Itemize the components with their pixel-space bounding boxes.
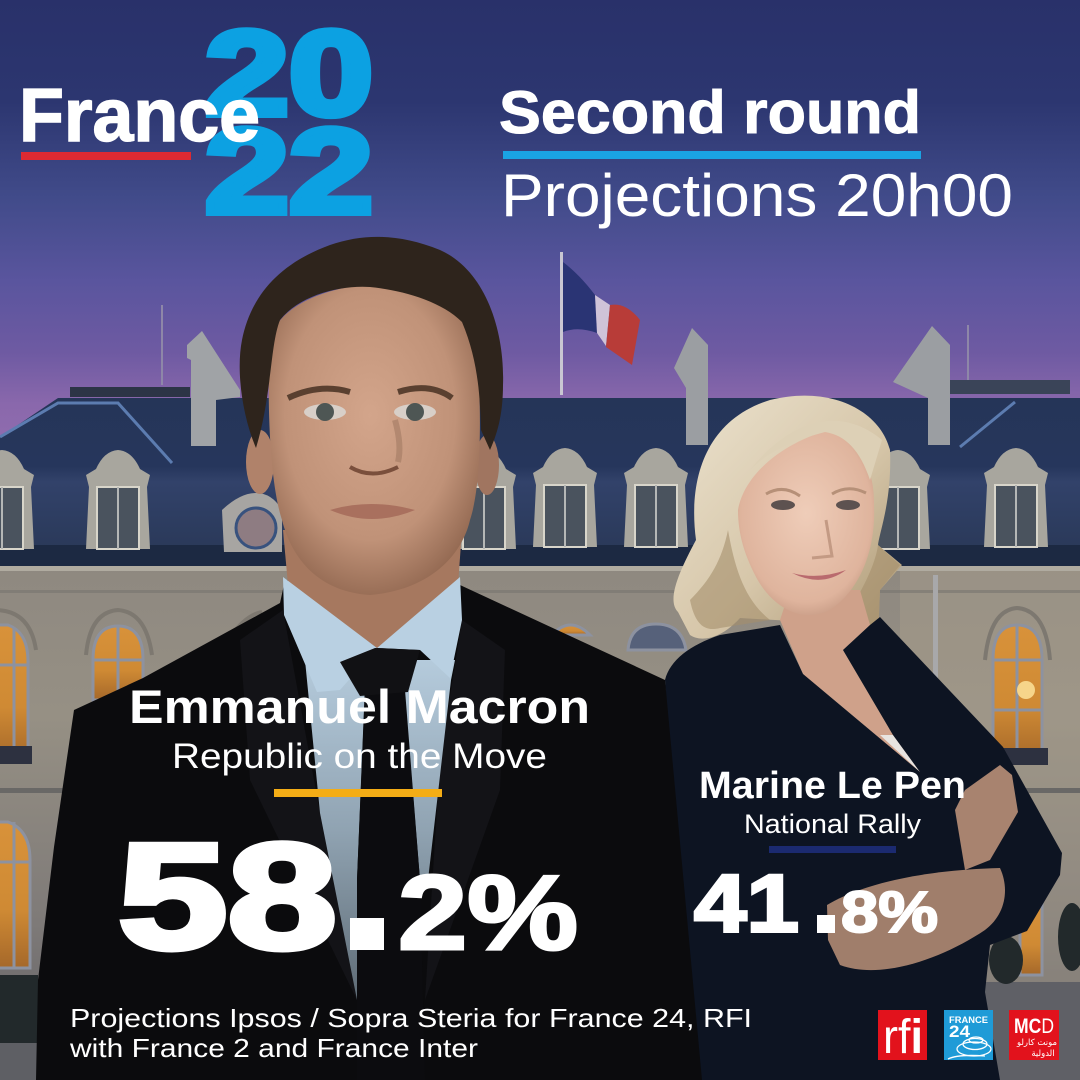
hair sweep over forehead [750, 421, 882, 480]
candidate name: Marine Le Pen [699, 765, 966, 807]
percentage: 41 [694, 858, 799, 950]
2022 digits: 20 [205, 6, 373, 140]
window mullions [0, 625, 1042, 968]
eyes [304, 404, 436, 420]
portrait: Marine Le Pen [665, 396, 1062, 1080]
jacket [665, 617, 1062, 1080]
nose [812, 520, 832, 558]
cornice [0, 545, 1080, 566]
logo: France 24: 24 [949, 1022, 971, 1041]
candidate name: Emmanuel Macron [129, 680, 590, 733]
logo: MCD [1009, 1010, 1059, 1060]
nose [350, 467, 398, 474]
roof dormers [0, 448, 1048, 549]
percentage [118, 812, 578, 980]
portrait: Emmanuel Macron [36, 237, 702, 1080]
chandelier glow [1017, 681, 1035, 699]
percentage: 2% [398, 854, 578, 972]
drainpipe [933, 575, 938, 790]
balcony rails [0, 746, 1048, 765]
result block: Macron [118, 680, 590, 980]
party colour bar [274, 789, 442, 797]
heading underline [503, 151, 921, 159]
shrubs [0, 903, 1080, 1043]
tie [357, 690, 425, 1080]
party: Republic on the Move [172, 737, 547, 776]
hair [673, 396, 902, 644]
percentage: 58 [118, 812, 337, 980]
party: National Rally [744, 809, 922, 839]
ground [0, 1040, 80, 1080]
percentage: 8% [841, 880, 938, 945]
collar [283, 577, 462, 692]
source note: Projections Ipsos / Sopra Steria for France 24, RFI [70, 1003, 752, 1033]
mouth [792, 570, 846, 580]
result block: Le Pen [694, 765, 966, 950]
neck [283, 530, 462, 648]
background: evening sky [0, 0, 1080, 440]
logo: RFI: rfi [883, 1011, 923, 1064]
logo: France 24 [944, 1010, 993, 1060]
window arches [0, 608, 1050, 660]
party colour bar [769, 846, 896, 853]
parapet [70, 387, 190, 397]
antennas [162, 305, 968, 385]
French flag on pole [560, 252, 640, 395]
oval window [222, 493, 282, 552]
lighter right side of facade [900, 565, 1080, 985]
red underline [21, 152, 191, 160]
hair shadow [690, 530, 900, 641]
mouth [330, 504, 415, 519]
percentage [694, 858, 938, 950]
eyes [771, 500, 795, 510]
background: Elysee palace [0, 305, 1080, 1080]
logo: MCD: الدولية [1031, 1049, 1055, 1059]
suit [36, 580, 702, 1080]
lapel shading [240, 610, 505, 1000]
neck and neckline [780, 590, 920, 772]
eyebrows [288, 388, 452, 398]
logo: France 24: FRANCE [949, 1015, 988, 1026]
source note [69, 1003, 752, 1063]
chimneys [187, 331, 240, 446]
France wordmark: France [19, 73, 260, 157]
roof ridge lines [0, 402, 1015, 463]
source note: with France 2 and France Inter [69, 1033, 478, 1063]
logo: France 2022: 22 [205, 104, 373, 238]
logo: MCD: MCD [1014, 1015, 1054, 1038]
upper hand [955, 765, 1018, 870]
face [269, 285, 480, 595]
palace facade [0, 560, 1080, 1080]
shirt strips [305, 660, 455, 1000]
palace roof [0, 398, 1080, 550]
ears [246, 430, 274, 494]
face [738, 430, 874, 615]
logo: MCD: مونت كارلو [1016, 1038, 1057, 1048]
tie knot [340, 648, 420, 696]
arched lit windows [0, 624, 1042, 975]
subheading: Projections 20h00: Projections 20h00 [501, 162, 1013, 229]
heading: Second round: Second round [499, 79, 921, 146]
hair [240, 237, 503, 450]
logo: France 2022 [19, 6, 373, 238]
blouse [880, 735, 920, 772]
lower hand [827, 868, 1005, 970]
